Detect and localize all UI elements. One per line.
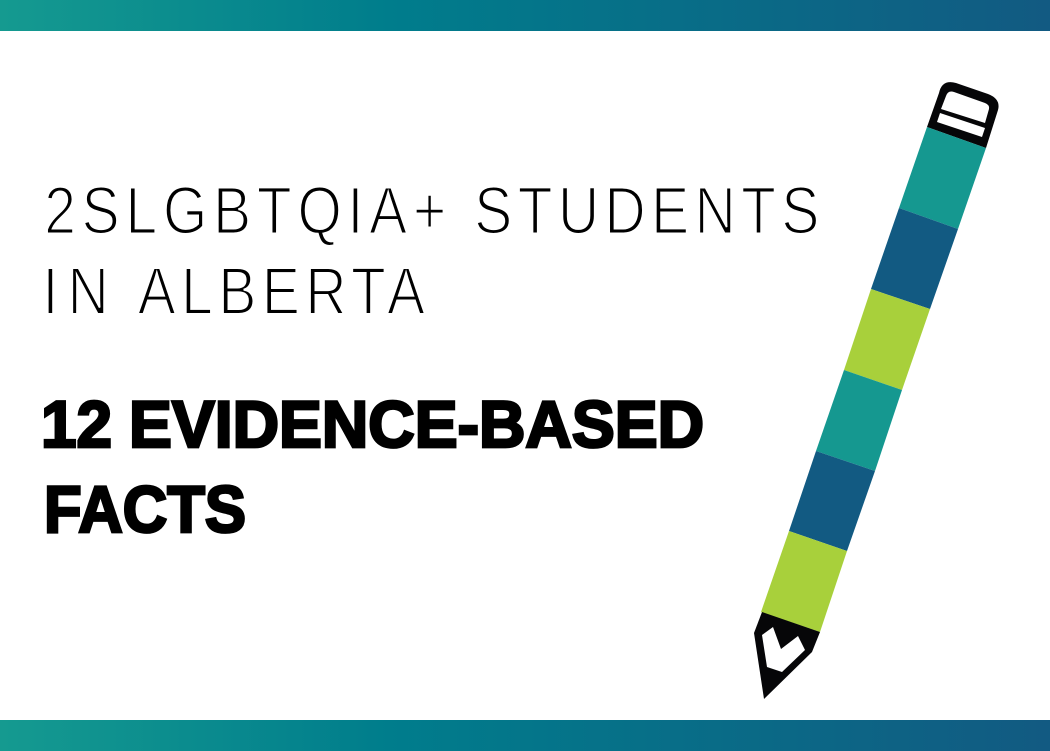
heading: 12 Evidence-Based Facts: EVIDENCE-BASED [129, 387, 704, 461]
icon: striped pencil [754, 82, 999, 699]
bottom gradient bar [0, 720, 1050, 751]
pencil tip with chevron [754, 612, 820, 699]
pencil body stripes [761, 127, 986, 632]
title: 2SLGBTQIA+ Students in Alberta: STUDENTS [474, 174, 819, 249]
title: 2SLGBTQIA+ Students in Alberta: IN [43, 255, 109, 329]
title: 2SLGBTQIA+ Students in Alberta: 2SLGBTQIA+ [44, 174, 446, 249]
heading: 12 Evidence-Based Facts [41, 387, 704, 546]
pencil eraser [927, 82, 999, 148]
heading: 12 Evidence-Based Facts: 12 [41, 387, 112, 461]
heading: 12 Evidence-Based Facts: FACTS [44, 472, 246, 546]
top gradient bar [0, 0, 1050, 31]
title: 2SLGBTQIA+ Students in Alberta [42, 174, 819, 329]
title: 2SLGBTQIA+ Students in Alberta: ALBERTA [138, 255, 425, 329]
